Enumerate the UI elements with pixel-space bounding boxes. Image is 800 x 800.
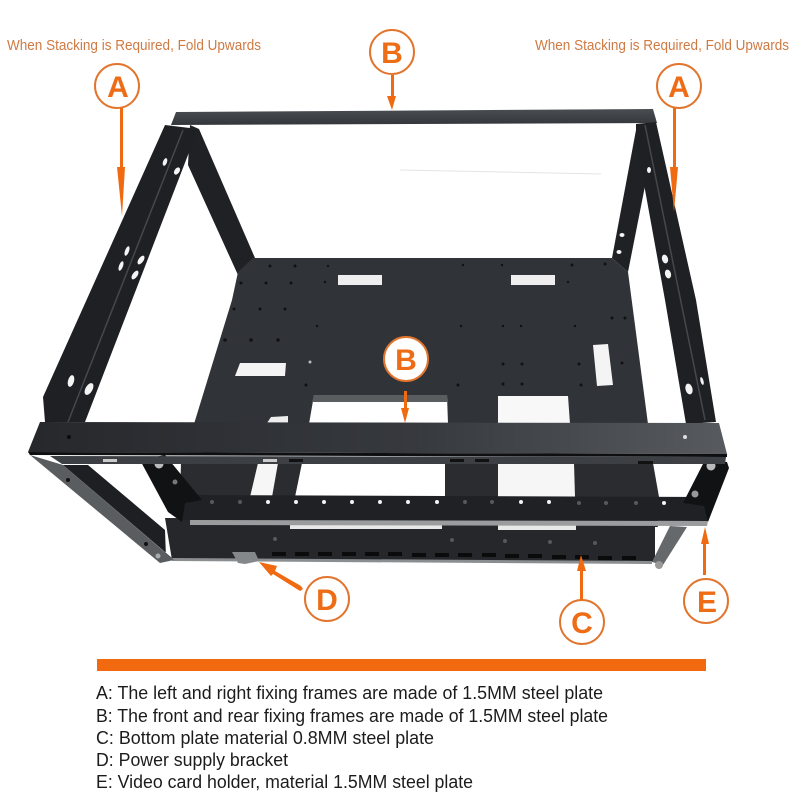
legend text: C: Bottom plate material 0.8MM steel plate [96,727,434,748]
right fixing frame [616,122,716,424]
right rear strut [612,130,645,272]
callout B front [384,337,428,423]
legend text: E: Video card holder, material 1.5MM steel plate [96,771,473,792]
video card holder [180,495,712,526]
rear fixing frame [171,109,657,125]
callout A right [657,64,701,212]
bottom plate seen through the front [180,463,659,497]
callout D [259,562,349,621]
orange divider bar [97,659,706,671]
bottom plate front lip [165,518,667,564]
front fixing frame [28,422,727,464]
callout D: D [316,584,338,617]
callout A right: A [668,71,690,104]
left fixing frame [43,125,198,422]
callout B rear: B [381,37,403,70]
holder right bracket [683,460,729,522]
callout B rear [370,30,414,110]
callout A left: A [107,71,129,104]
legend text: D: Power supply bracket [96,749,288,770]
callout E: E [697,586,717,619]
callout A left [95,64,139,216]
note: left fold instruction: When Stacking is Required, Fold Upwards [7,38,261,54]
legend text: A: The left and right fixing frames are made of 1.5MM steel plate [96,682,603,703]
faint reflection line [400,170,601,174]
callout B front: B [395,344,417,377]
callout E [684,527,728,623]
frame photo: steel chassis [28,109,729,569]
legend text [96,682,608,792]
left rear strut [188,125,255,275]
bottom plate, upper visible part [194,258,648,424]
note: right fold instruction: When Stacking is Required, Fold Upwards [535,38,789,54]
legend text: B: The front and rear fixing frames are made of 1.5MM steel plate [96,705,608,726]
right leg [652,526,687,569]
callout C [560,555,604,644]
callout C: C [571,607,593,640]
left leg [30,455,174,563]
holder left bracket [140,455,202,522]
power supply bracket [232,552,259,564]
